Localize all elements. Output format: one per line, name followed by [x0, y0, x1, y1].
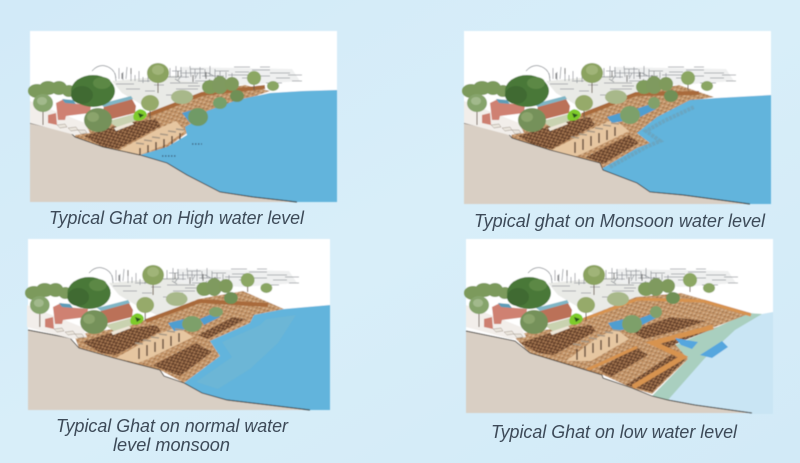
panel: normal water level monsoon: [25, 239, 330, 410]
water: [184, 305, 330, 410]
submerged steps: [196, 315, 296, 389]
buildings: [466, 300, 583, 339]
sky: [466, 239, 773, 413]
buildings: [464, 96, 581, 135]
shoreline: [464, 123, 750, 204]
caption: high water level: Typical Ghat on High water level: [49, 208, 305, 228]
panel: monsoon water level: [462, 31, 771, 204]
exposed riverbed: [652, 313, 762, 400]
trees: [462, 63, 713, 132]
riverbank: [464, 123, 750, 204]
buildings: [30, 96, 147, 135]
swimmers: [162, 144, 202, 156]
water: [603, 95, 771, 204]
riverbank: [30, 123, 297, 202]
town sketch: [89, 268, 299, 315]
buildings: [27, 300, 144, 339]
town sketch: [92, 66, 302, 113]
sky: [464, 31, 771, 204]
caption: normal water level monsoon: level monsoon: [113, 435, 230, 455]
ghat steps: [510, 85, 714, 168]
ghat steps: [512, 293, 751, 394]
town sketch: [526, 66, 736, 113]
shallow water: [652, 312, 773, 414]
caption: normal water level monsoon: Typical Ghat on normal water: [56, 416, 289, 436]
blue pools: [675, 338, 698, 349]
sky: [30, 31, 337, 202]
town sketch: [528, 268, 738, 315]
trees: [464, 265, 715, 334]
caption: normal water level monsoon: [56, 416, 289, 455]
shoreline: [466, 331, 752, 413]
orange walkways: [633, 327, 713, 387]
shoreline: [28, 330, 310, 410]
panel: low water level: [464, 239, 773, 414]
sky: [28, 239, 330, 410]
ghat steps: [74, 291, 284, 383]
caption: monsoon water level: Typical ghat on Monsoon water level: [474, 211, 766, 231]
riverbank: [28, 330, 310, 410]
panel: high water level: [28, 31, 337, 202]
trees: [25, 265, 272, 334]
caption: low water level: Typical Ghat on low water level: [491, 422, 738, 442]
shoreline: [30, 123, 297, 202]
water: [140, 90, 337, 202]
ghat steps: [75, 85, 270, 159]
riverbank: [466, 331, 752, 413]
trees: [28, 63, 279, 132]
submerged steps: [610, 107, 694, 167]
